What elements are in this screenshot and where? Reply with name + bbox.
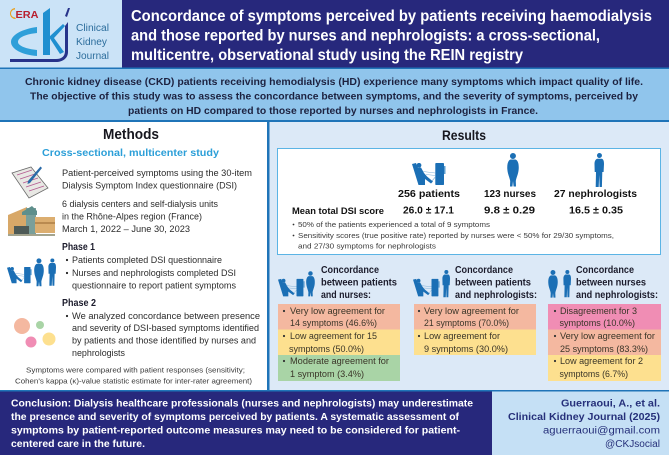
conclusion panel: Conclusion: Dialysis healthcare professionals (nurses and nephrologists) may underestimate — [11, 398, 473, 410]
agreement: disagreement — [548, 304, 661, 330]
agreement: disagreement: Disagreement for 3 — [560, 306, 637, 316]
key findings bullets — [293, 220, 614, 250]
footnote: comparison method: Symptoms were compared with patient responses (sensitivity; — [26, 366, 245, 374]
icon: patient and nephrologist — [413, 270, 450, 297]
mean total DSI scores: Mean total DSI score — [292, 206, 384, 217]
participant counts: 27 nephrologists — [554, 188, 637, 200]
logo: journal name — [76, 23, 109, 62]
agreement: low — [548, 355, 661, 381]
agreement: low: symptoms (6.7%) — [560, 369, 628, 379]
heading: patients and nephrologists — [455, 265, 537, 301]
panel: results — [267, 122, 669, 391]
participant counts — [398, 188, 637, 200]
mean total DSI scores: 26.0 ± 17.1 — [403, 204, 454, 216]
background statement band: Chronic kidney disease (CKD) patients receiving hemodialysis (HD) experience many symptoms which impact quality of life. — [25, 77, 643, 88]
conclusion panel: centered care in the future. — [11, 439, 145, 450]
agreement: low: Low agreement for — [424, 331, 500, 341]
phase 2 bullets: by patients and those identified by nurses and — [72, 336, 256, 346]
agreement: low — [278, 330, 400, 355]
citation panel: Clinical Kidney Journal (2025) — [508, 412, 660, 423]
heading: nurses and nephrologists — [576, 265, 658, 301]
agreement: moderate: 1 symptom (3.4%) — [290, 369, 364, 379]
text: centers and dates: March 1, 2022 – June 30, 2023 — [62, 224, 190, 234]
key findings bullets: 50% of the patients experienced a total of 9 symptoms — [298, 220, 490, 229]
heading: patients and nephrologists: and nephrologists: — [455, 290, 537, 301]
agreement: low — [414, 330, 536, 355]
text: questionnaire: Dialysis Symptom Index questionnaire (DSI) — [62, 180, 237, 190]
heading: patients and nurses: between patients — [321, 278, 398, 288]
phase 1 bullets: Nurses and nephrologists completed DSI — [72, 268, 236, 278]
conclusion panel: symptoms by patient-reported outcome measures may need to be considered for patient- — [11, 426, 460, 436]
phase 1 heading: Phase 1 — [62, 242, 95, 253]
panel: methods — [0, 122, 267, 391]
methods heading: Methods — [103, 126, 159, 143]
icon: patient on dialysis — [412, 163, 446, 185]
text: questionnaire — [62, 168, 252, 190]
logo: c letter — [11, 27, 37, 56]
heading: patients and nurses — [321, 265, 398, 301]
participant counts: 123 nurses — [484, 188, 536, 200]
phase 2 bullets: nephrologists — [72, 348, 125, 358]
key findings bullets: and 27/30 symptoms for nephrologists — [298, 242, 436, 250]
citation panel: Guerraoui, A., et al. — [561, 398, 660, 410]
text: centers and dates — [62, 199, 218, 234]
logo: k letter — [43, 8, 65, 55]
header: title panel: multicentre, observational study using the REIN registry — [131, 47, 523, 64]
logo: j accent — [65, 8, 70, 17]
background statement band: patients on HD compared to those reported by nurses and nephrologists in France. — [128, 106, 538, 117]
background statement band — [0, 68, 669, 122]
agreement: very low: 14 symptoms (46.6%) — [290, 318, 377, 328]
phase 1 bullets — [66, 255, 236, 290]
agreement: moderate — [278, 355, 400, 381]
concordance: patients and nurses — [278, 265, 400, 381]
phase 2 bullets — [66, 311, 260, 358]
icon: patient, nurse and nephrologist — [7, 258, 56, 286]
conclusion panel — [0, 390, 669, 455]
participant counts: 256 patients — [398, 188, 460, 200]
logo: ERA mark: ERA — [16, 10, 38, 21]
agreement: very low: Very low agreement for — [290, 306, 385, 316]
footnote: comparison method — [15, 366, 252, 386]
concordance: nurses and nephrologists — [548, 265, 661, 381]
logo: j stroke — [10, 22, 68, 62]
agreement: low: symptoms (50.0%) — [289, 344, 364, 354]
heading: nurses and nephrologists: and nephrologists: — [576, 290, 658, 301]
icon: nurse — [507, 153, 519, 186]
agreement: low: Low agreement for 15 — [290, 331, 377, 341]
text: questionnaire: Patient-perceived symptoms using the 30-item — [62, 168, 252, 178]
citation panel: @CKJsocial — [605, 439, 660, 450]
heading: patients and nurses: Concordance — [321, 265, 380, 276]
logo: journal name: Clinical — [76, 23, 109, 34]
background statement band: The objective of this study was to assess the concordance between symptoms, and the severity of symptoms, perceived by — [30, 92, 638, 102]
agreement: moderate: Moderate agreement for — [290, 356, 389, 366]
results heading: Results — [442, 128, 486, 143]
heading: patients and nephrologists: between patients — [455, 278, 532, 288]
agreement: very low: 21 symptoms (70.0%) — [424, 318, 509, 328]
study design subheading: Cross-sectional, multicenter study — [42, 147, 219, 159]
agreement: very low: Very low agreement for — [560, 331, 655, 341]
header: title panel: and those reported by nurses and nephrologists: a cross-sectional, — [131, 28, 600, 44]
mean total DSI scores — [292, 204, 623, 217]
icon: clipboard questionnaire — [12, 166, 48, 198]
heading: patients and nurses: and nurses: — [321, 290, 371, 301]
phase 1 bullets: questionnaire to report patient symptoms — [72, 280, 236, 290]
heading: patients and nephrologists: Concordance — [455, 265, 514, 276]
agreement: very low — [278, 304, 400, 330]
mean total DSI scores: 9.8 ± 0.29 — [484, 204, 535, 216]
phase 2 bullets: We analyzed concordance between presence — [72, 311, 260, 321]
phase 2 bullets: and severity of DSI-based symptoms identified — [72, 323, 259, 333]
heading: nurses and nephrologists: Concordance — [576, 265, 635, 276]
phase 2 heading: Phase 2 — [62, 298, 96, 309]
mean total DSI scores: 16.5 ± 0.35 — [569, 204, 623, 216]
icon: agreement colour circles — [14, 318, 56, 348]
agreement: low: Low agreement for 2 — [560, 356, 643, 366]
citation panel — [492, 392, 669, 455]
icon: dialysis center building — [8, 206, 55, 236]
text: centers and dates: 6 dialysis centers and self-dialysis units — [62, 199, 218, 209]
agreement: very low — [548, 330, 661, 355]
agreement: very low — [414, 304, 536, 330]
icon: nephrologist — [594, 153, 604, 187]
header: title panel — [122, 0, 669, 68]
conclusion panel: the presence and severity of symptoms perceived by patients. A systematic assessment of — [11, 412, 460, 423]
icon: patient and nurse — [278, 271, 315, 296]
participant summary box — [278, 148, 660, 254]
phase 1 bullets: Patients completed DSI questionnaire — [72, 255, 222, 265]
icon: nurse and nephrologist — [548, 270, 571, 298]
agreement: low: 9 symptoms (30.0%) — [424, 344, 508, 354]
header: journal logo panel — [0, 0, 122, 68]
heading: nurses and nephrologists: between nurses — [576, 278, 647, 288]
agreement: very low: Very low agreement for — [424, 306, 519, 316]
citation panel: aguerraoui@gmail.com — [543, 426, 660, 436]
text: centers and dates: in the Rhône-Alpes region (France) — [62, 212, 202, 222]
logo: journal name: Kidney — [76, 37, 107, 48]
key findings bullets: Sensitivity scores (true positive rate) reported by nurses were < 50% for 29/30 symptoms, — [298, 231, 614, 240]
agreement: disagreement: symptoms (10.0%) — [560, 318, 635, 328]
concordance: patients and nephrologists — [413, 265, 537, 355]
agreement: very low: 25 symptoms (83.3%) — [560, 344, 648, 354]
footnote: comparison method: Cohen's kappa (κ)-value statistic estimate for inter-rater agreement) — [15, 376, 252, 386]
logo: journal name: Journal — [76, 51, 109, 62]
